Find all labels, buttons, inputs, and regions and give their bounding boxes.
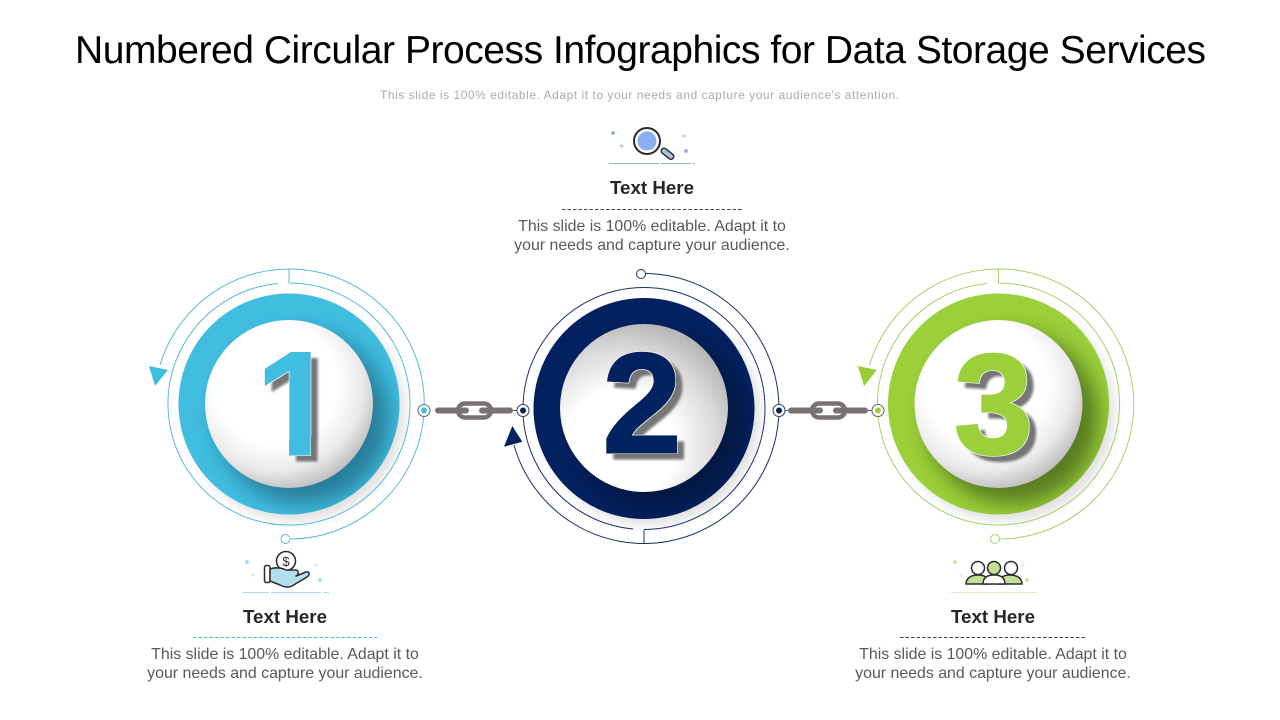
end dot 3: [990, 534, 1000, 544]
node: green: [872, 404, 884, 416]
node: navy right: [773, 404, 785, 416]
block: left text: Text Here: [243, 607, 327, 627]
block: left text: your needs and capture your audience.: [147, 665, 423, 682]
node: navy left: [517, 404, 529, 416]
title: Numbered Circular Process Infographics for Data Storage Services: [75, 29, 1206, 72]
number 2: 2: [602, 324, 682, 484]
inner arc 1: [168, 269, 410, 525]
sphere 2: [560, 324, 728, 492]
block: right text: This slide is 100% editable. Adapt it to: [859, 646, 1127, 663]
inner arc 2: [523, 287, 765, 544]
block: left text: [147, 607, 423, 682]
outer arc 2: [514, 274, 779, 543]
block: right text: [855, 607, 1131, 682]
icon: hand with coin: [243, 552, 329, 592]
block: top text: Text Here: [610, 178, 694, 198]
end dot 2: [636, 270, 646, 278]
block: top text: This slide is 100% editable. Adapt it to: [518, 218, 786, 235]
end dot 1: [281, 534, 290, 544]
chain link 1 to 2: [438, 404, 517, 418]
number 1: 1: [255, 320, 338, 487]
panel: step 2 circle: [504, 270, 779, 544]
outer arc 1: [160, 269, 424, 539]
panel: step 1 circle: [149, 269, 424, 544]
inner arc 3: [877, 269, 1119, 525]
sphere 3: [914, 320, 1082, 488]
node: blue: [418, 404, 430, 416]
arrowhead 2: [504, 426, 522, 447]
icon: three people: [951, 560, 1037, 592]
block: top text: your needs and capture your audience.: [514, 237, 790, 254]
arrowhead 3: [858, 366, 877, 386]
arrowhead 1: [149, 366, 168, 386]
block: left text: This slide is 100% editable. Adapt it to: [151, 646, 419, 663]
subtitle: This slide is 100% editable. Adapt it to your needs and capture your audience's attention.: [380, 88, 899, 102]
icon: hand with coin: $: [282, 554, 290, 569]
outer arc 3: [870, 269, 1134, 539]
number 3: 3: [954, 326, 1033, 484]
ring 3: [888, 294, 1109, 514]
block: right text: your needs and capture your audience.: [855, 665, 1131, 682]
sphere 1: [205, 320, 373, 488]
ring 1: [178, 294, 400, 514]
chain link 2 to 3: [785, 404, 872, 418]
panel: step 3 circle: [858, 269, 1134, 544]
block: top text: [514, 178, 790, 254]
block: right text: Text Here: [951, 607, 1035, 627]
icon: magnifier: [609, 128, 695, 164]
ring 2: [534, 298, 754, 519]
